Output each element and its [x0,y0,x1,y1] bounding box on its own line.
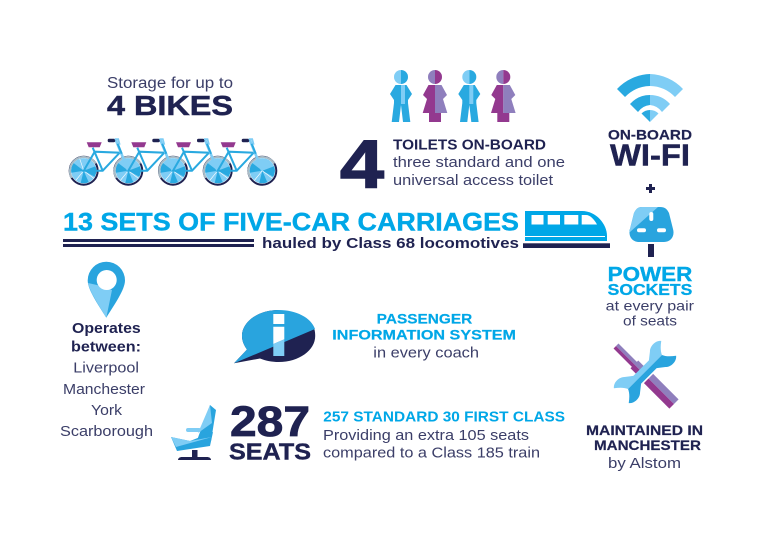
icon: information speech bubble [234,310,315,363]
text: passenger information system [332,311,516,361]
text: operates between: Liverpool [73,361,139,377]
text: operates between [60,321,153,440]
text: on-board wi-fi [608,126,692,173]
title: 13 sets of five-car carriages: 13 SETS OF FIVE-CAR CARRIAGES [63,209,519,237]
text: toilets on-board: three standard and one [393,154,565,171]
double rule lines [63,239,254,247]
text: seat breakdown [323,410,565,462]
text: storage for up to 4 bikes: 4 BIKES [107,90,233,121]
text: seat breakdown: Providing an extra 105 seats [323,427,529,444]
text: storage for up to 4 bikes: Storage for up to [107,75,233,92]
text: 287 seats: SEATS [229,438,311,464]
icon: seat [171,405,216,460]
icon: crossed spanner and screwdriver [611,338,679,409]
text: maintained in manchester: MANCHESTER [594,438,701,453]
text: operates between: York [91,403,123,419]
text: operates between: between: [71,340,141,356]
text: seat breakdown: compared to a Class 185 train [323,445,540,462]
big number 4: 4 [340,127,384,203]
icon: train [523,211,610,248]
icon: power socket [629,207,674,257]
text: power sockets [606,264,694,329]
text: maintained in manchester: MAINTAINED IN [586,423,703,438]
text: toilets on-board: universal access toilet [393,172,554,189]
text: passenger information system: in every coach [373,344,479,361]
text: operates between: Scarborough [60,424,153,440]
icon: wifi [617,74,683,122]
text: on-board wi-fi: ON-BOARD [608,126,692,142]
text: operates between: Operates [72,321,141,337]
text: toilets on-board [393,137,565,189]
text: storage for up to 4 bikes [107,75,233,121]
icon: location pin [88,262,125,318]
subtitle: hauled by class 68 locomotives: hauled by Class 68 locomotives [262,236,519,252]
text: seat breakdown: 257 STANDARD 30 FIRST CLASS [323,410,565,426]
text: operates between: Manchester [63,382,145,398]
text: passenger information system: INFORMATION SYSTEM [332,327,516,342]
text: power sockets: at every pair [606,298,694,314]
text: maintained in manchester [586,423,703,472]
text: toilets on-board: TOILETS ON-BOARD [393,137,546,153]
text: on-board wi-fi: WI-FI [610,138,690,173]
text: passenger information system: PASSENGER [377,311,473,326]
icon: row of bikes [70,139,276,185]
text: 287 seats: 287 [230,398,310,446]
text: maintained in manchester: by Alstom [608,455,681,472]
text: power sockets: of seats [623,313,677,329]
plus sign [646,184,655,193]
text: 287 seats [229,398,311,464]
text: power sockets: POWER [608,264,693,286]
icon: toilet figures [390,70,516,122]
text: power sockets: SOCKETS [608,282,693,299]
